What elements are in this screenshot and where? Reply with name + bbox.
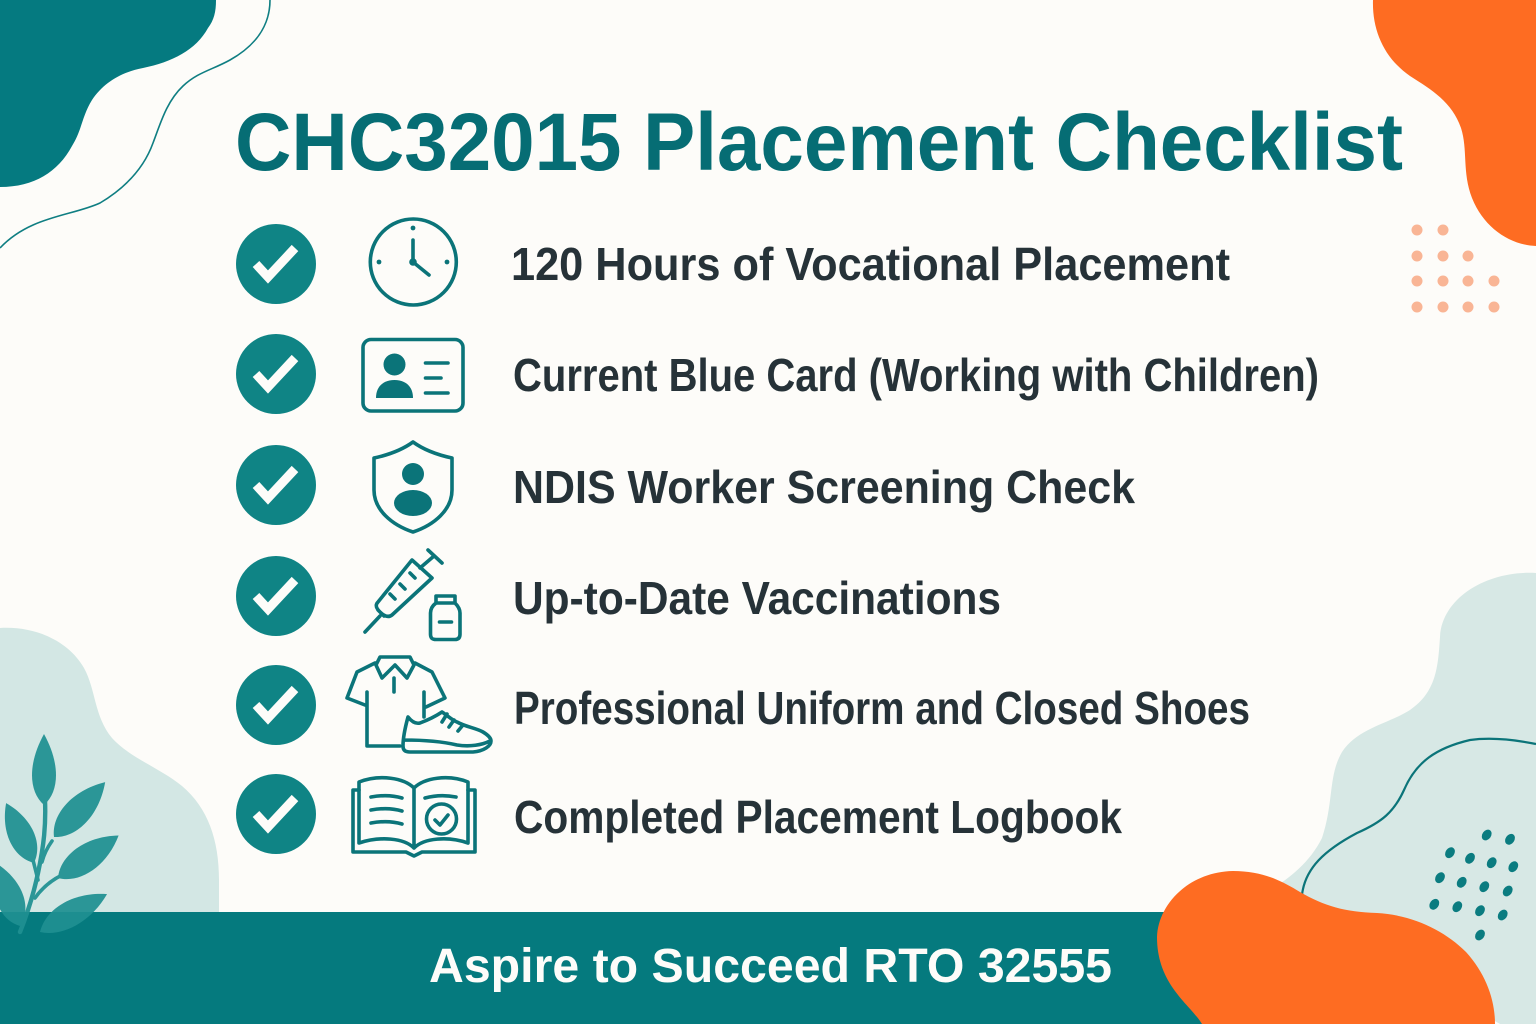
decorative teal dot cluster	[1427, 828, 1520, 942]
plant illustration	[0, 734, 126, 942]
check badge 2	[236, 334, 316, 414]
footer text: Aspire to Succeed RTO 32555	[429, 940, 1112, 993]
checklist row 4: vaccinations	[236, 550, 1001, 640]
label: NDIS: NDIS Worker Screening Check	[513, 461, 1135, 513]
label: blue card: Current Blue Card (Working with Children)	[513, 349, 1319, 401]
decorative pale blob bottom left	[0, 628, 219, 920]
footer banner	[0, 912, 1300, 1024]
decorative orange dot grid	[1412, 224, 1500, 312]
check badge 5	[236, 665, 316, 745]
check badge 3	[236, 445, 316, 525]
label: 120 hours: 120 Hours of Vocational Placement	[511, 238, 1230, 290]
icon: ID card	[363, 340, 463, 411]
check badge 1	[236, 224, 316, 304]
checklist row 6: logbook	[236, 774, 1122, 856]
decorative curve top left	[0, 0, 270, 248]
check badge 4	[236, 556, 316, 636]
icon: clock	[370, 219, 456, 305]
icon: open logbook	[353, 778, 475, 856]
decorative orange blob bottom right	[1157, 871, 1495, 1024]
checklist row 3: NDIS	[236, 442, 1135, 532]
checklist row 5: uniform	[236, 657, 1250, 752]
icon: shield with person	[374, 442, 452, 532]
checklist row 2: blue card	[236, 334, 1319, 414]
title: CHC32015 Placement Checklist	[235, 97, 1403, 188]
decorative pale blob bottom right	[1270, 573, 1536, 1024]
label: vaccinations: Up-to-Date Vaccinations	[513, 572, 1001, 624]
icon: polo shirt and shoe	[347, 657, 491, 752]
check badge 6	[236, 774, 316, 854]
decorative curve bottom right	[1302, 739, 1536, 895]
label: uniform: Professional Uniform and Closed Shoes	[514, 682, 1250, 734]
icon: syringe and vial	[365, 550, 460, 640]
checklist row 1: hours	[236, 219, 1230, 305]
decorative orange blob top right	[1373, 0, 1536, 246]
label: logbook: Completed Placement Logbook	[514, 791, 1122, 843]
decorative teal blob top left	[0, 0, 216, 187]
